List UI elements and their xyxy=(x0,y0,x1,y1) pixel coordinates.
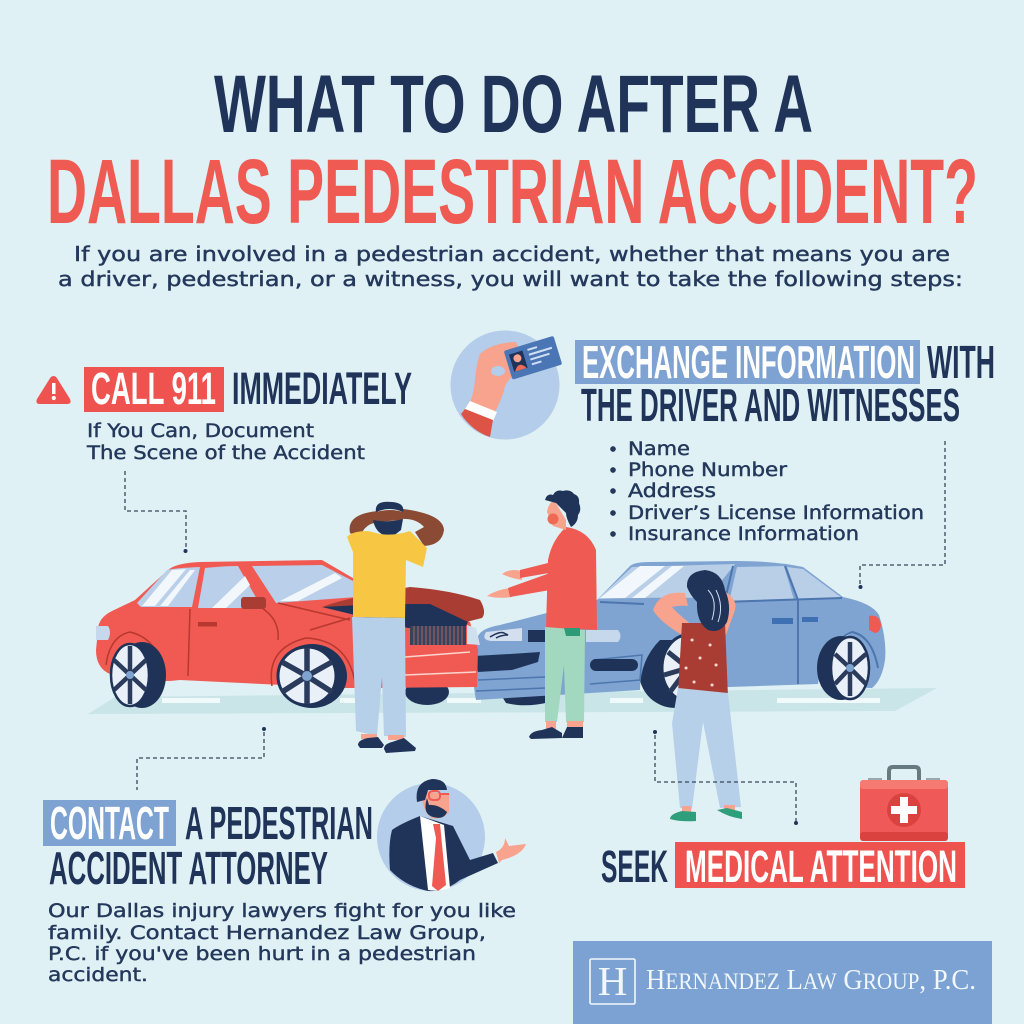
highlight: call 911: CALL 911 xyxy=(91,363,216,414)
intro text: If you are involved in a pedestrian accident, whether that means you are xyxy=(74,242,950,266)
step: call 911 xyxy=(36,363,412,464)
illustration: attorney xyxy=(377,779,526,891)
logo: hernandez law group xyxy=(573,941,992,1024)
text: contact paragraph: accident. xyxy=(48,964,148,986)
step: seek medical attention: SEEK xyxy=(601,841,668,892)
intro text: a driver, pedestrian, or a witness, you will want to take the following steps: xyxy=(58,267,963,291)
text: contact paragraph: Our Dallas injury lawyers fight for you like xyxy=(48,900,516,922)
title xyxy=(47,59,978,243)
text: document the scene: The Scene of the Accident xyxy=(86,443,365,464)
text: document the scene xyxy=(86,421,365,464)
person: woman with curly hair xyxy=(653,570,742,821)
intro text xyxy=(58,242,963,291)
step: seek medical attention xyxy=(601,841,965,892)
heading: immediately: IMMEDIATELY xyxy=(232,363,412,414)
step: contact attorney xyxy=(43,797,373,894)
step: contact attorney: CONTACT xyxy=(50,797,169,849)
list: information to exchange: Insurance Information xyxy=(628,524,859,545)
step: exchange information xyxy=(575,336,995,431)
highlight: call 911 xyxy=(84,363,224,414)
text: contact paragraph xyxy=(48,900,516,986)
connector: exchange to blue car xyxy=(858,441,945,589)
icon: warning triangle xyxy=(36,376,71,404)
logo: hernandez law group: HERNANDEZ LAW GROUP, P.C. xyxy=(646,964,976,996)
text: contact paragraph: P.C. if you've been hurt in a pedestrian xyxy=(48,943,476,965)
icon: hand holding license xyxy=(450,330,562,440)
person: man in red sweater xyxy=(487,490,597,739)
list: information to exchange: Phone Number xyxy=(628,460,787,481)
connector: medical to woman xyxy=(653,730,798,825)
connector: cars to contact xyxy=(137,727,266,790)
text: contact paragraph: family. Contact Hernandez Law Group, xyxy=(48,922,486,944)
road shadow xyxy=(88,688,937,714)
list: information to exchange xyxy=(610,439,924,545)
connector: call 911 to car xyxy=(125,471,188,553)
text: document the scene: If You Can, Document xyxy=(87,421,314,442)
step: contact attorney: A PEDESTRIAN xyxy=(185,797,373,849)
icon: first aid kit xyxy=(860,767,948,841)
list: information to exchange: Driver’s License Information xyxy=(628,503,924,524)
list: information to exchange: Name xyxy=(628,439,690,460)
person: man in yellow shirt xyxy=(347,502,444,753)
logo: hernandez law group: H xyxy=(598,958,627,1004)
step: contact attorney: ACCIDENT ATTORNEY xyxy=(49,842,328,894)
illustration: blue car xyxy=(473,561,885,708)
illustration: red car xyxy=(96,560,484,708)
list: information to exchange: Address xyxy=(628,481,716,502)
